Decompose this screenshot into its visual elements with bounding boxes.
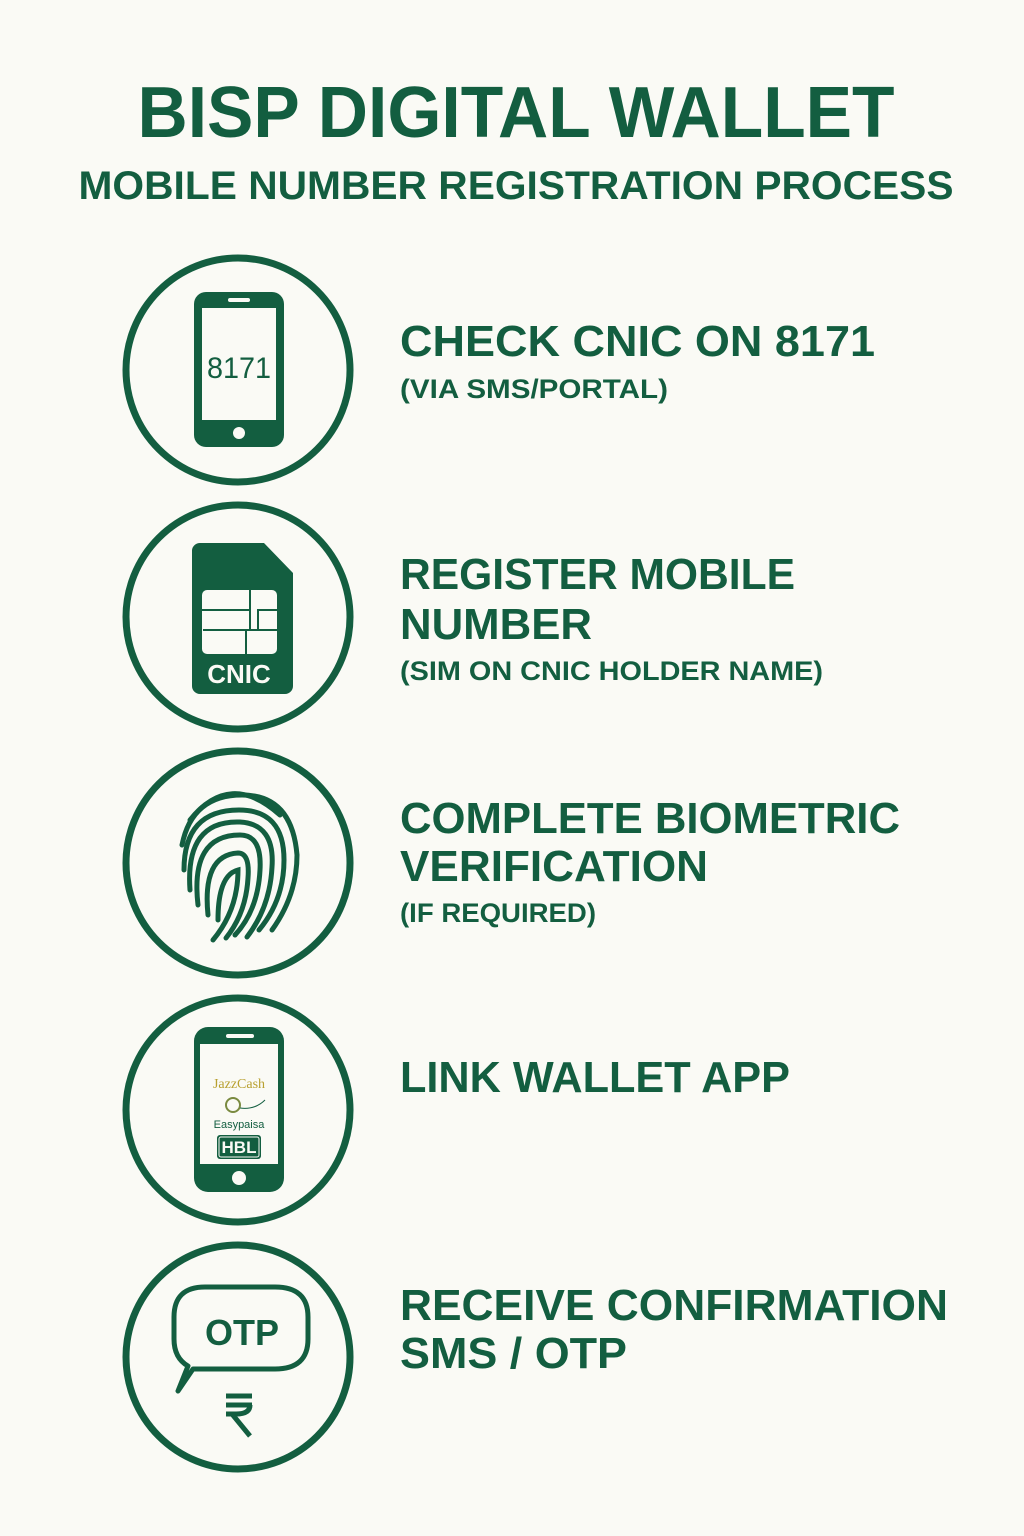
title: BISP DIGITAL WALLET bbox=[138, 73, 895, 153]
step 5 text bbox=[400, 1281, 948, 1378]
step 4 text: LINK WALLET APP bbox=[400, 1053, 790, 1102]
icon: SIM card CNIC bbox=[126, 505, 350, 729]
step 2 text: NUMBER bbox=[400, 600, 592, 649]
step 1: check CNIC bbox=[126, 258, 875, 482]
step 2 text: (SIM ON CNIC HOLDER NAME) bbox=[400, 656, 823, 686]
step 1 text bbox=[400, 317, 875, 404]
icon: phone with wallet apps: HBL bbox=[222, 1138, 256, 1157]
icon: phone with wallet apps bbox=[126, 998, 350, 1222]
step 3 text: VERIFICATION bbox=[400, 842, 708, 891]
icon: fingerprint bbox=[126, 751, 350, 975]
icon: phone with wallet apps: Easypaisa bbox=[214, 1119, 265, 1131]
step 1 text: (VIA SMS/PORTAL) bbox=[400, 374, 668, 404]
step 3 text: COMPLETE BIOMETRIC bbox=[400, 794, 900, 843]
step 3: biometric bbox=[126, 751, 900, 975]
icon: OTP bubble: OTP bbox=[205, 1312, 279, 1353]
title bbox=[78, 73, 954, 208]
subtitle: MOBILE NUMBER REGISTRATION PROCESS bbox=[78, 164, 954, 208]
step 4: link wallet bbox=[126, 998, 790, 1222]
step 2 text bbox=[400, 550, 823, 686]
step 2: register mobile bbox=[126, 505, 823, 729]
icon: phone 8171 bbox=[126, 258, 350, 482]
step 2 text: REGISTER MOBILE bbox=[400, 550, 795, 599]
step 3 text bbox=[400, 794, 900, 928]
step 5: confirmation bbox=[126, 1245, 948, 1469]
step 3 text: (IF REQUIRED) bbox=[400, 898, 596, 928]
icon: OTP bubble bbox=[126, 1245, 350, 1469]
icon: SIM card CNIC: CNIC bbox=[207, 659, 271, 689]
icon: phone 8171: 8171 bbox=[207, 352, 271, 385]
step 5 text: SMS / OTP bbox=[400, 1329, 627, 1378]
icon: phone with wallet apps: JazzCash bbox=[213, 1077, 265, 1092]
step 5 text: RECEIVE CONFIRMATION bbox=[400, 1281, 948, 1330]
step 1 text: CHECK CNIC ON 8171 bbox=[400, 317, 875, 366]
